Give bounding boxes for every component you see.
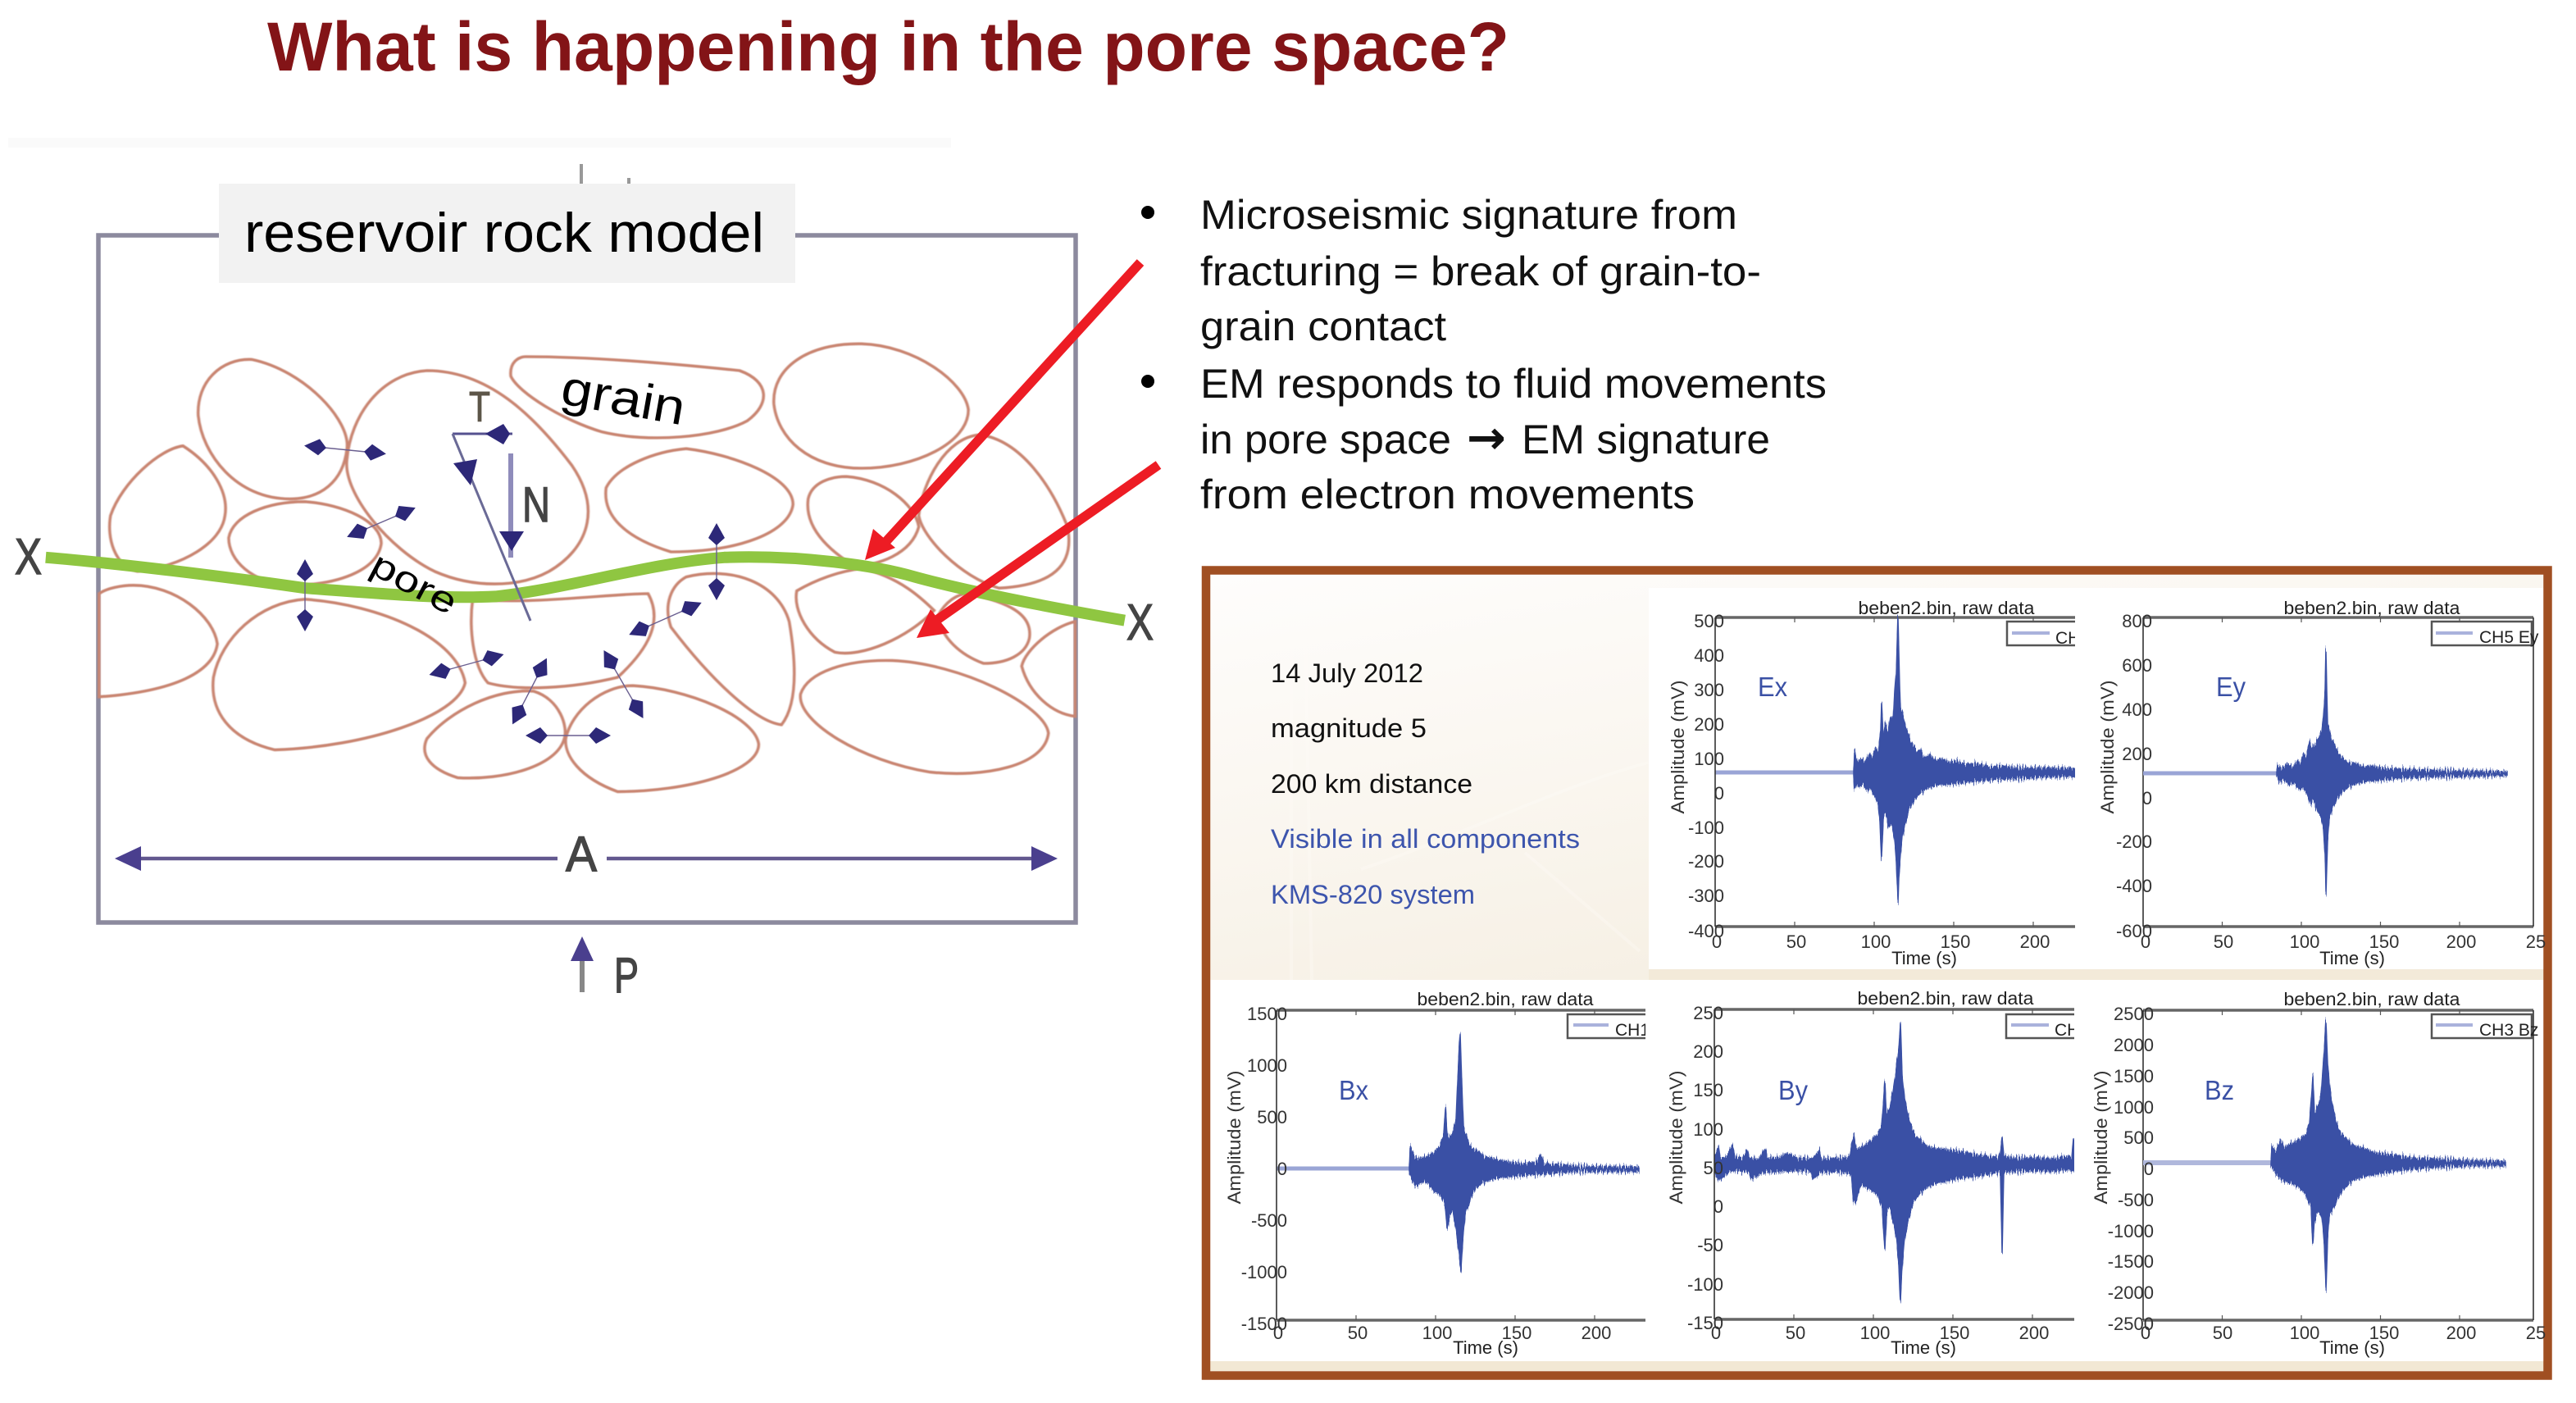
panel: reservoir rock model — [15, 164, 1154, 1003]
chart: Ey: 200 — [2122, 744, 2152, 764]
chart: Bz: 500 — [2123, 1127, 2154, 1148]
chart: By: 0 — [1714, 1196, 1723, 1217]
chart: Bx: CH1 — [1615, 1021, 1650, 1040]
chart: Bz: 150 — [2369, 1323, 2399, 1343]
chart: By: 0 — [1711, 1323, 1721, 1343]
chart: Bz: Bz — [2205, 1075, 2234, 1105]
chart: Bz: beben2.bin, raw data — [2284, 989, 2460, 1009]
chart: By: -100 — [1687, 1274, 1723, 1295]
event description text: 200 km distance — [1271, 769, 1472, 799]
chart: Ex: Time (s) — [1891, 948, 1957, 968]
panel frame — [1206, 571, 2548, 1376]
title: What is happening in the pore space? — [267, 8, 1509, 85]
area dimension arrow A — [115, 827, 1058, 881]
chart: Bx: 200 — [1582, 1323, 1611, 1343]
stress vectors T and N: N — [522, 477, 550, 532]
event description text: 14 July 2012 — [1271, 658, 1423, 688]
panel background — [1210, 575, 2544, 980]
chart: Ey: 0 — [2142, 788, 2152, 809]
chart: By: -150 — [1687, 1313, 1723, 1333]
chart: Ex: -200 — [1688, 851, 1724, 872]
chart: Ey: 0 — [2141, 932, 2150, 952]
chart: By: CH — [2055, 1021, 2079, 1040]
chart: Bx: 50 — [1348, 1323, 1368, 1343]
panel: seismic and EM recordings — [1206, 571, 2548, 1376]
chart: Bx: 150 — [1502, 1323, 1531, 1343]
chart: Ex: 200 — [2020, 932, 2050, 952]
chart: Ey: Amplitude (mV) — [2097, 681, 2118, 813]
chart: Ey: -400 — [2116, 876, 2152, 896]
chart: By: -50 — [1697, 1235, 1723, 1255]
red arrow 2 — [917, 465, 1158, 638]
chart: Ex: 150 — [1941, 932, 1970, 952]
chart: Bz: 1000 — [2114, 1097, 2154, 1118]
beige strip between rows — [1649, 969, 2544, 980]
white plot area row 2 — [1210, 980, 2544, 1361]
chart: Ey: beben2.bin, raw data — [2284, 598, 2460, 618]
chart: Ey: 400 — [2122, 699, 2152, 720]
chart: Ey: 800 — [2122, 611, 2152, 631]
chart: Bz: CH3 Bz — [2479, 1021, 2538, 1040]
label: X left: X — [15, 529, 42, 585]
chart: Ex: beben2.bin, raw data — [1858, 598, 2035, 618]
chart: Bx: Amplitude (mV) — [1224, 1071, 1245, 1204]
chart: Ey: 600 — [2122, 655, 2152, 676]
chart: By: 50 — [1704, 1158, 1723, 1178]
chart: Bx: 1000 — [1247, 1055, 1287, 1076]
chart: By — [1666, 988, 2105, 1358]
chart: By: 150 — [1693, 1080, 1723, 1100]
chart: Bx: beben2.bin, raw data — [1417, 989, 1594, 1009]
bullet list: Microseismic signature from — [1200, 192, 1737, 238]
chart: By: 100 — [1860, 1323, 1890, 1343]
chart: Ex: -400 — [1688, 921, 1724, 941]
chart: Bx: -500 — [1251, 1210, 1287, 1231]
chart: Bx: 500 — [1257, 1107, 1287, 1127]
bullet list: fracturing = break of grain-to- — [1200, 248, 1761, 294]
chart: Bz: 200 — [2446, 1323, 2476, 1343]
chart: Bx: 0 — [1277, 1159, 1287, 1179]
chart: Bx: 1500 — [1247, 1004, 1287, 1024]
background texture — [1291, 623, 1648, 980]
chart: By: 250 — [1693, 1003, 1723, 1023]
chart: Ex: 100 — [1694, 749, 1724, 769]
bullet list: EM responds to fluid movements — [1200, 361, 1827, 407]
chart: Ex — [1668, 598, 2105, 968]
chart: Bx — [1224, 989, 1666, 1358]
chart: Bz: 25 — [2526, 1323, 2546, 1343]
top pressure arrow stub — [581, 164, 629, 184]
chart: Bz: 50 — [2213, 1323, 2232, 1343]
label: X right: X — [1126, 594, 1154, 651]
event description text: magnitude 5 — [1271, 713, 1427, 743]
chart: By: 200 — [2019, 1323, 2049, 1343]
chart: Ex: CH — [2055, 629, 2080, 648]
chart: Ey: Ey — [2216, 672, 2246, 702]
chart: Bz: -1000 — [2108, 1221, 2154, 1241]
force arrows at grain contacts — [305, 447, 717, 736]
chart: Bz: Amplitude (mV) — [2091, 1071, 2111, 1204]
chart: Ex: 400 — [1694, 645, 1724, 666]
event description text: KMS-820 system — [1271, 880, 1475, 909]
chart: By: 200 — [1693, 1041, 1723, 1062]
chart: By: Time (s) — [1891, 1337, 1956, 1358]
white plot area row 1 — [1649, 588, 2544, 969]
chart: By: By — [1778, 1075, 1808, 1105]
event description text: Visible in all components — [1271, 824, 1580, 854]
chart: Bz: 2000 — [2114, 1035, 2154, 1055]
chart: Bx: -1000 — [1241, 1262, 1287, 1282]
chart: Bx: 100 — [1422, 1323, 1452, 1343]
chart: Ey: 150 — [2369, 932, 2399, 952]
chart: Bz: 0 — [2144, 1159, 2154, 1179]
green pore line X-X — [46, 557, 1125, 621]
chart: Ex: 0 — [1712, 932, 1722, 952]
chart: Bz: -2500 — [2108, 1314, 2154, 1334]
chart: Ex: 500 — [1694, 611, 1724, 631]
chart: Ey: 100 — [2290, 932, 2319, 952]
chart: Bx: 0 — [1273, 1323, 1283, 1343]
label box: reservoir rock model — [219, 184, 795, 283]
chart: Bz: 0 — [2141, 1323, 2150, 1343]
stress vectors T and N: T — [469, 384, 490, 431]
chart: Ex: -300 — [1688, 886, 1724, 906]
chart: By: 100 — [1693, 1119, 1723, 1140]
chart: Bx: -1500 — [1241, 1314, 1287, 1334]
chart: Bz: 2500 — [2114, 1004, 2154, 1024]
chart: Bz: 1500 — [2114, 1066, 2154, 1086]
chart: Ex: 200 — [1694, 714, 1724, 735]
bullet list: from electron movements — [1200, 471, 1695, 517]
chart: Ey: -600 — [2116, 921, 2152, 941]
chart: Ey: Time (s) — [2319, 948, 2385, 968]
bullet list: EM signature — [1522, 417, 1770, 462]
chart: By: Amplitude (mV) — [1666, 1071, 1686, 1204]
chart: Bx: Bx — [1339, 1075, 1368, 1105]
chart: Bz: -2000 — [2108, 1282, 2154, 1303]
stress vectors T and N — [453, 384, 550, 621]
chart: Ey: 25 — [2526, 932, 2546, 952]
chart: Ex: -100 — [1688, 818, 1724, 838]
chart: Ey — [2097, 598, 2546, 968]
label: grain: grain — [558, 360, 690, 435]
faint ghost text strip — [8, 138, 951, 148]
chart: Bz: -1500 — [2108, 1251, 2154, 1272]
chart: Bz: -500 — [2118, 1190, 2154, 1210]
model frame — [98, 235, 1076, 922]
chart: Ey: 200 — [2446, 932, 2476, 952]
chart: Ex: 50 — [1786, 932, 1806, 952]
label box: reservoir rock model: reservoir rock model — [244, 202, 764, 264]
red arrow 1 — [865, 262, 1140, 560]
pressure arrow P: P — [614, 948, 639, 1003]
chart: Ex: 0 — [1714, 783, 1724, 804]
chart: Ex: 100 — [1861, 932, 1891, 952]
bullet list: → — [1467, 412, 1506, 465]
bullet list — [1141, 192, 1827, 517]
chart: By: 50 — [1786, 1323, 1805, 1343]
chart: Ex: 300 — [1694, 680, 1724, 700]
beige strip bottom — [1210, 1361, 2544, 1371]
chart: Bz: Time (s) — [2319, 1337, 2385, 1358]
label: pore: pore — [364, 544, 464, 622]
event description text — [1271, 658, 1580, 909]
chart: Bz — [2091, 989, 2546, 1358]
chart: Bz: 100 — [2290, 1323, 2319, 1343]
chart: Ey: 50 — [2214, 932, 2233, 952]
chart: By: beben2.bin, raw data — [1858, 988, 2034, 1009]
chart: By: 150 — [1940, 1323, 1969, 1343]
bullet list: grain contact — [1200, 303, 1446, 349]
chart: Ey: -200 — [2116, 831, 2152, 852]
grains — [99, 344, 1075, 791]
pressure arrow P — [571, 936, 639, 1003]
chart: Ey: CH5 Ey — [2479, 628, 2539, 647]
area dimension arrow A: A — [566, 827, 597, 881]
bullet list: in pore space — [1200, 417, 1451, 462]
chart: Ex: Amplitude (mV) — [1668, 681, 1688, 813]
chart: Ex: Ex — [1758, 672, 1787, 702]
chart: Bx: Time (s) — [1453, 1337, 1518, 1358]
